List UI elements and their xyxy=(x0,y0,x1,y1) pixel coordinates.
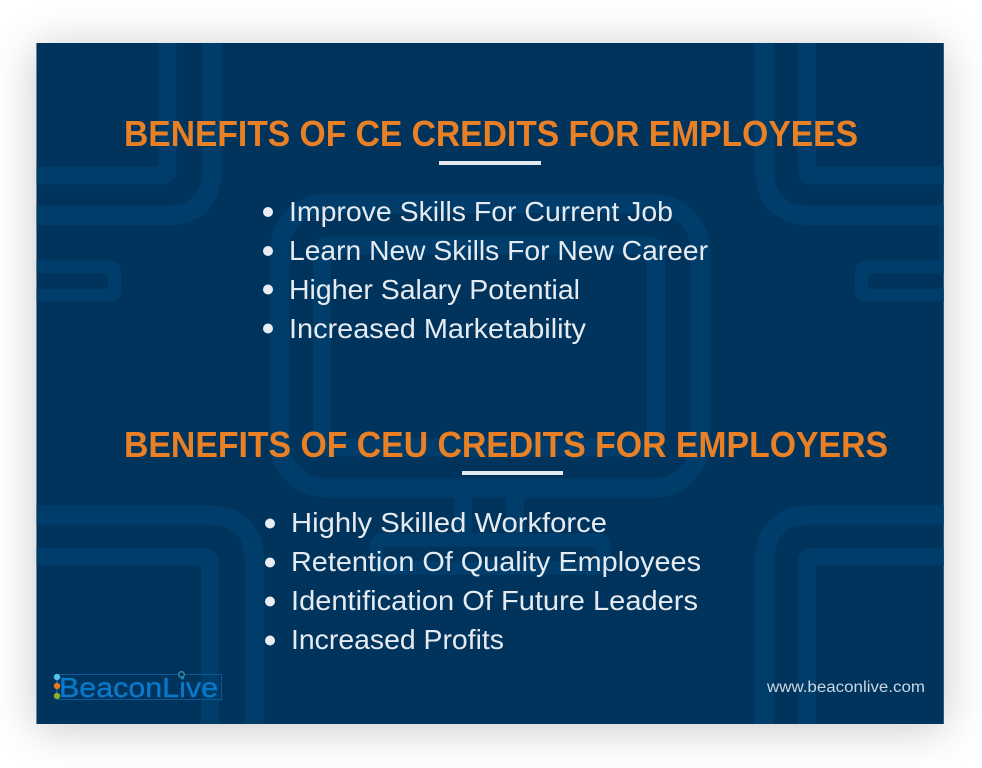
logo: BeaconLive: BeaconLive xyxy=(59,672,218,703)
bullet: salary potential: Higher Salary Potential xyxy=(289,274,580,305)
heading rule: employers xyxy=(462,471,563,475)
bullet: profits: Increased Profits xyxy=(291,624,504,655)
heading: employers: BENEFITS OF CEU CREDITS FOR EMPLOYERS xyxy=(124,424,888,465)
bullet: marketability: Increased Marketability xyxy=(289,313,586,344)
list: employee benefits xyxy=(263,196,708,344)
list: employer benefits xyxy=(265,507,701,655)
bullet: future leaders: Identification Of Future Leaders xyxy=(291,585,698,616)
bullet: improve skills: Improve Skills For Current Job xyxy=(289,196,673,227)
bullet: learn new skills: Learn New Skills For New Career xyxy=(289,235,708,266)
bullet: skilled workforce: Highly Skilled Workforce xyxy=(291,507,607,538)
heading: employees: BENEFITS OF CE CREDITS FOR EMPLOYEES xyxy=(124,113,858,154)
bullet: retention: Retention Of Quality Employees xyxy=(291,546,701,577)
website url: www.beaconlive.com xyxy=(766,679,925,696)
heading rule: employees xyxy=(439,161,541,165)
